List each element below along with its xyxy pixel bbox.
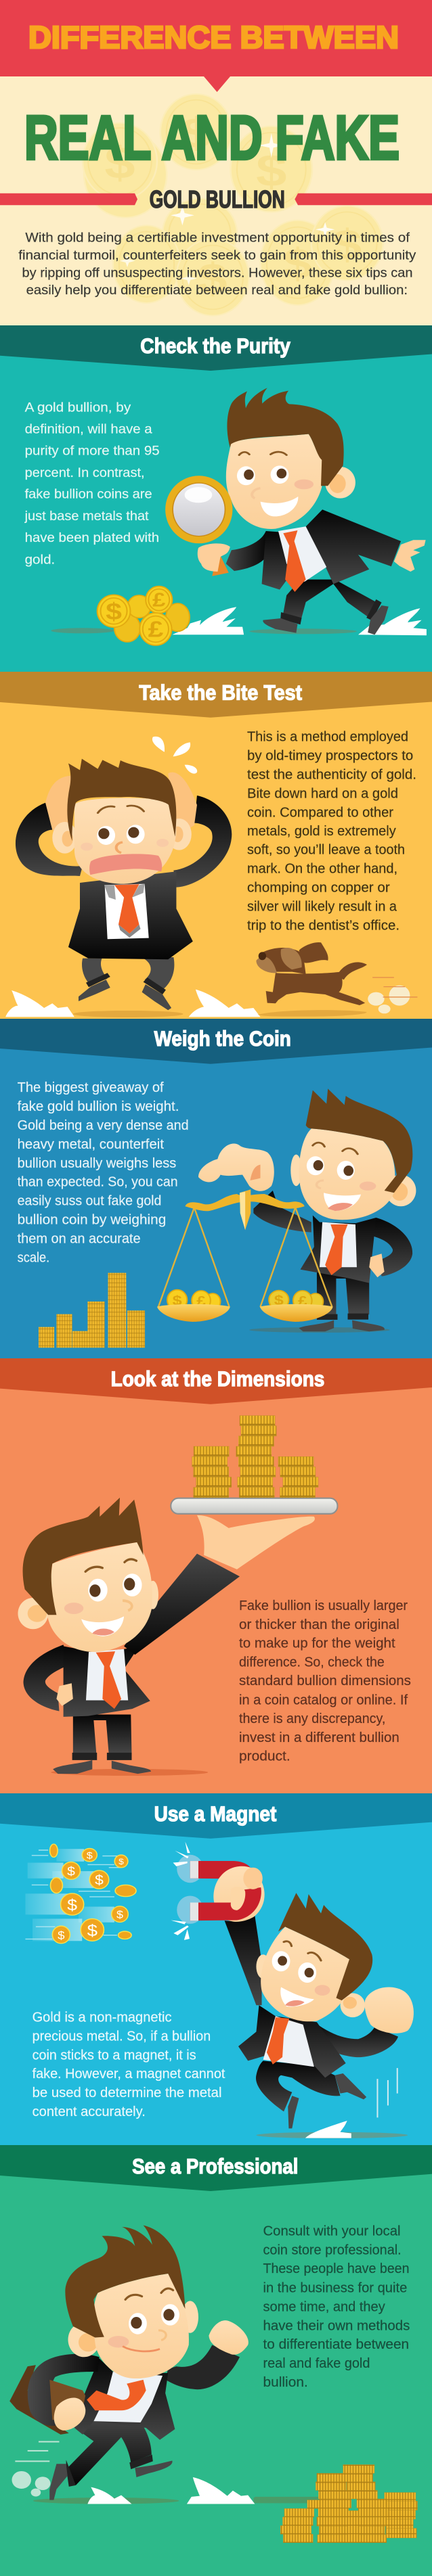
body text: trip to the dentist’s office. <box>247 918 399 933</box>
illustration: flying coins: $ <box>87 1850 93 1861</box>
red ribbon right <box>295 193 432 205</box>
body text: heavy metal, counterfeit <box>18 1137 164 1152</box>
body text: than expected. So, you can <box>18 1175 178 1190</box>
heading: Take the Bite Test <box>139 680 303 704</box>
body text: soft, so you’ll leave a tooth <box>247 843 405 858</box>
red ribbon left <box>0 193 137 205</box>
background coins: $ <box>198 254 228 302</box>
heading band <box>0 2145 432 2191</box>
body text: by old-timey prospectors to <box>247 749 413 764</box>
body text: fake bullion coins are <box>25 487 152 502</box>
illustration: man with tray of coins <box>18 1416 337 1776</box>
body text: metals, gold is extremely <box>247 824 396 839</box>
body text: coin. Compared to other <box>247 805 393 820</box>
illustration: man with magnifier: $ <box>106 599 122 625</box>
background coins: $ <box>283 239 312 288</box>
body text <box>24 400 160 567</box>
body text: or thicker than the original <box>239 1617 399 1632</box>
illustration: running man with briefcase <box>9 2226 325 2504</box>
body text: product. <box>239 1749 290 1764</box>
body text: real and fake gold <box>263 2356 370 2371</box>
illustration: man with scale: £ <box>298 1293 307 1308</box>
heading: See a Professional <box>132 2154 298 2178</box>
body text: Gold is a non-magnetic <box>33 2010 171 2025</box>
body text: have been plated with <box>25 530 159 545</box>
panel: use a magnet <box>0 1793 432 2145</box>
subtitle: gold bullion: GOLD BULLION <box>150 185 285 213</box>
body text: Bite down hard on a gold <box>247 786 398 801</box>
heading band <box>0 672 432 718</box>
panel: check the purity <box>0 325 432 672</box>
illustration: flying coins: $ <box>67 1865 75 1879</box>
title: difference between: DIFFERENCE BETWEEN <box>28 20 399 55</box>
illustration: man with magnet <box>171 1841 414 2138</box>
body text <box>239 1598 411 1764</box>
body text: fake. However, a magnet cannot <box>33 2067 225 2082</box>
body text: gold. <box>25 552 55 567</box>
background coins <box>83 94 383 316</box>
heading: Look at the Dimensions <box>111 1366 324 1391</box>
body text: some time, and they <box>263 2299 385 2314</box>
body text: bullion coin by weighing <box>18 1213 166 1228</box>
heading: Check the Purity <box>140 334 290 358</box>
body text: to differentiate between <box>263 2337 409 2352</box>
heading: Weigh the Coin <box>154 1026 291 1051</box>
panel: weigh the coin <box>0 1019 432 1358</box>
illustration: man with scale: $ <box>173 1292 182 1308</box>
illustration: flying coins: $ <box>95 1872 104 1888</box>
illustration: man with scale <box>39 1088 416 1348</box>
intro text <box>18 230 416 298</box>
body text: to make up for the weight <box>239 1636 395 1651</box>
red header band <box>0 0 432 92</box>
body text: bullion. <box>263 2375 308 2390</box>
body text <box>18 1080 189 1265</box>
illustration: scared man <box>5 737 417 1017</box>
panel: look at the dimensions <box>0 1358 432 1793</box>
body text: standard bullion dimensions <box>239 1674 411 1688</box>
illustration: flying coins: $ <box>67 1896 77 1914</box>
body text: silver will likely result in a <box>247 899 397 914</box>
body text: in the business for quite <box>263 2280 407 2295</box>
body text: Consult with your local <box>263 2224 401 2239</box>
intro text: by ripping off unsuspecting investors. However, these six tips can <box>22 265 413 280</box>
body text: This is a method employed <box>247 730 408 745</box>
body text: mark. On the other hand, <box>247 862 397 877</box>
panel: header <box>0 0 432 326</box>
body text: fake gold bullion is weight. <box>18 1099 179 1114</box>
body text: A gold bullion, by <box>25 400 131 415</box>
background coins: $ <box>256 145 286 196</box>
body text: These people have been <box>263 2261 409 2276</box>
body text <box>33 2010 225 2119</box>
body text: Gold being a very dense and <box>18 1118 189 1133</box>
body text: precious metal. So, if a bullion <box>33 2029 211 2044</box>
body text: The biggest giveaway of <box>18 1080 164 1095</box>
body text: definition, will have a <box>25 421 152 436</box>
body text <box>247 730 416 933</box>
illustration: man with magnifier <box>51 388 427 645</box>
body text: invest in a different bullion <box>239 1730 399 1745</box>
illustration: man with magnifier: £ <box>148 616 164 642</box>
heading band <box>0 1019 432 1064</box>
intro text: financial turmoil, counterfeiters seek to gain from this opportunity <box>18 248 416 262</box>
illustration: man with magnifier: £ <box>152 589 166 611</box>
body text: there is any discrepancy, <box>239 1711 385 1726</box>
body text: scale. <box>18 1250 49 1265</box>
illustration: flying coins: $ <box>116 1909 124 1920</box>
panel: see a professional <box>0 2145 432 2576</box>
body text: bullion usually weighs less <box>18 1156 176 1171</box>
illustration: flying coins: $ <box>87 1921 98 1940</box>
body text: in a coin catalog or online. If <box>239 1693 408 1707</box>
body text: have their own methods <box>263 2318 410 2333</box>
body text <box>263 2224 410 2390</box>
intro text: easily help you differentiate between real and fake gold bullion: <box>26 283 408 298</box>
body text: coin sticks to a magnet, it is <box>33 2048 196 2063</box>
body text: just base metals that <box>24 509 149 524</box>
coin stacks <box>280 2464 417 2543</box>
heading band <box>0 1358 432 1404</box>
illustration: man with scale: $ <box>274 1292 284 1308</box>
illustration: flying coins: $ <box>58 1929 65 1941</box>
heading band <box>0 1793 432 1839</box>
body text: Fake bullion is usually larger <box>239 1598 408 1613</box>
background coins: $ <box>104 137 135 188</box>
body text: them on an accurate <box>18 1232 141 1247</box>
illustration: flying coins: $ <box>118 1857 125 1866</box>
body text: chomping on copper or <box>247 880 390 895</box>
body text: coin store professional. <box>263 2243 402 2258</box>
illustration: man with scale: £ <box>196 1293 206 1308</box>
body text: content accurately. <box>33 2104 146 2119</box>
body text: percent. In contrast, <box>25 465 145 480</box>
intro text: With gold being a certifiable investment opportunity in times of <box>25 230 410 245</box>
body text: be used to determine the metal <box>33 2086 221 2100</box>
panel: take the bite test <box>0 672 432 1019</box>
background coins: $ <box>332 221 362 269</box>
body text: difference. So, check the <box>239 1655 385 1670</box>
body text: easily suss out fake gold <box>18 1194 161 1209</box>
heading band <box>0 325 432 371</box>
body text: purity of more than 95 <box>25 444 160 459</box>
body text: test the authenticity of gold. <box>247 768 416 783</box>
illustration: flying coins <box>25 1844 136 1944</box>
background coins: $ <box>181 109 211 157</box>
heading: Use a Magnet <box>154 1801 277 1826</box>
